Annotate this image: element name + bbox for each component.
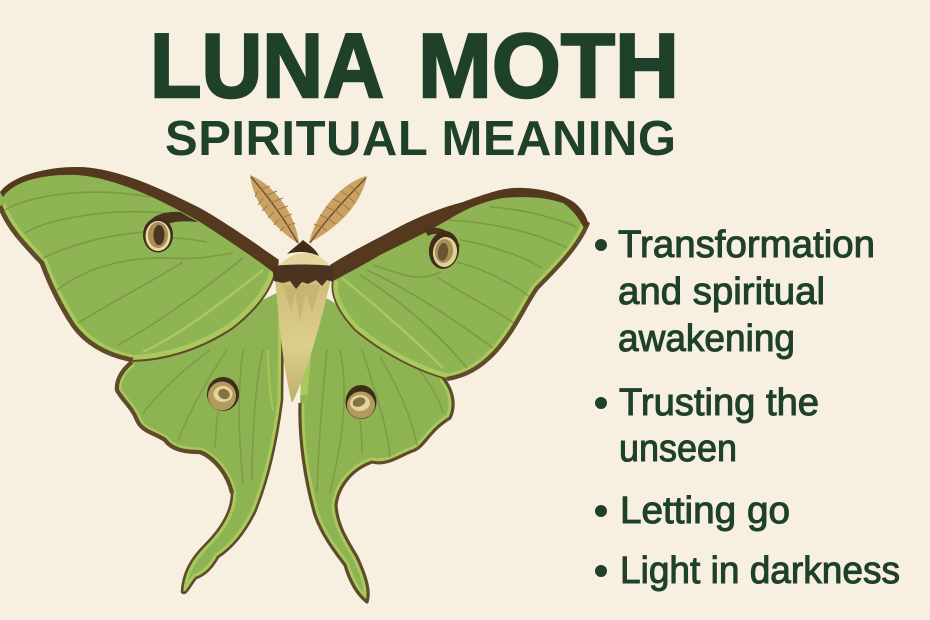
bullet: trusting the unseen: unseen xyxy=(619,428,737,470)
bullet: letting go: Letting go xyxy=(620,490,790,532)
right antenna xyxy=(309,176,367,243)
left hindwing xyxy=(117,290,283,593)
bullet: transformation: Transformation xyxy=(618,224,875,266)
left forewing xyxy=(0,167,279,361)
title: LUNA xyxy=(150,16,384,117)
moth illustration xyxy=(0,167,589,602)
bullet: trusting the unseen xyxy=(595,382,819,470)
eyespot: right hindwing xyxy=(346,385,376,419)
bullet: transformation: awakening xyxy=(618,318,795,360)
eyespot: right forewing xyxy=(424,228,461,271)
right forewing leading edge xyxy=(330,188,589,281)
right forewing xyxy=(330,188,589,379)
moth body xyxy=(272,240,333,403)
left forewing leading edge xyxy=(0,167,279,273)
bullet: trusting the unseen: Trusting the xyxy=(619,382,819,424)
title xyxy=(150,16,679,117)
thorax xyxy=(277,253,331,268)
title: MOTH xyxy=(418,16,679,117)
eyespot: left hindwing xyxy=(207,377,239,411)
subtitle: SPIRITUAL MEANING xyxy=(165,112,676,166)
bullet: transformation xyxy=(595,224,875,360)
head xyxy=(287,240,319,256)
bullet list xyxy=(595,224,900,592)
bullet: light in darkness: Light in darkness xyxy=(620,550,900,592)
abdomen xyxy=(275,278,331,403)
left antenna xyxy=(250,175,299,244)
right hindwing xyxy=(300,290,453,602)
eyespot: left forewing xyxy=(143,212,198,252)
dark collar xyxy=(272,264,333,289)
bullet: transformation: and spiritual xyxy=(618,271,825,313)
